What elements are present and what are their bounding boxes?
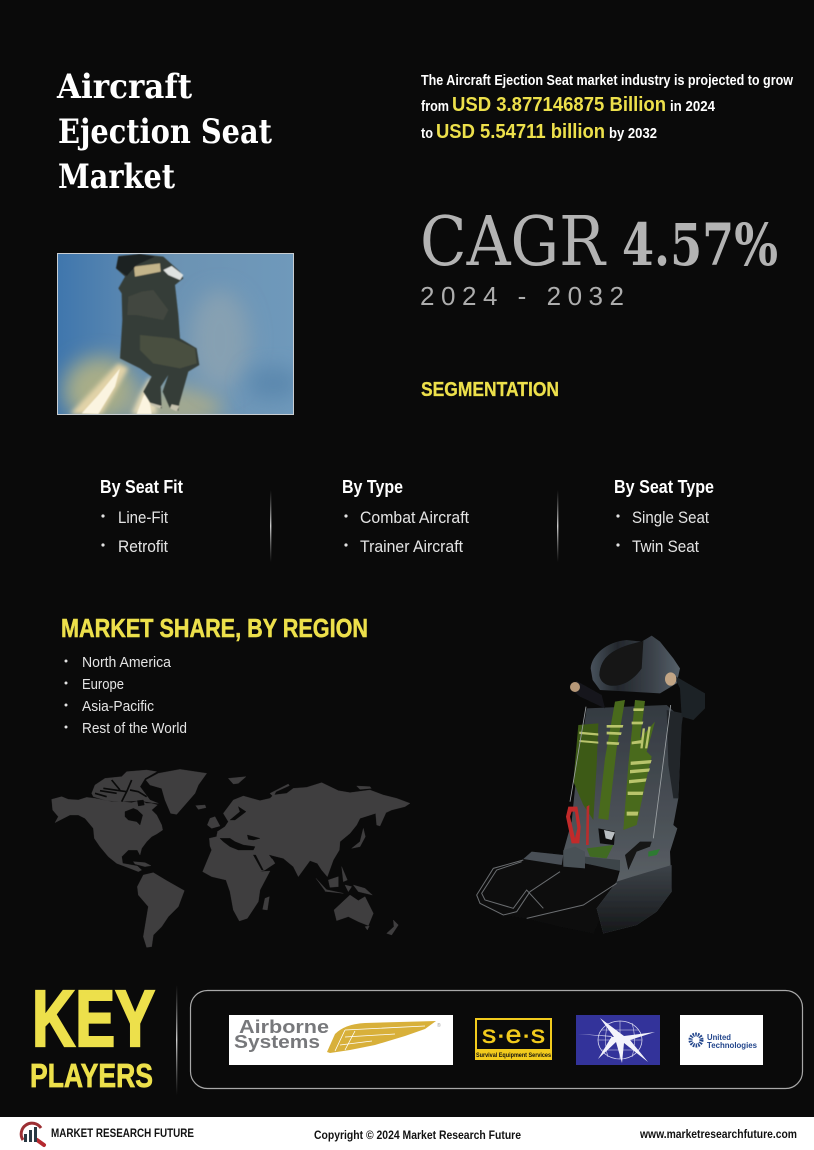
segment column: by seat fit: By Seat Fit [100,477,183,497]
logo: Airborne Systems: ® [437,1022,441,1029]
heading: key players: PLAYERS [30,1057,153,1094]
title: Aircraft [56,67,192,107]
title [56,67,272,197]
segment column: by seat type: By Seat Type [614,477,714,497]
CAGR figure: CAGR [420,203,607,282]
panel: key player logos [190,990,802,1088]
footer: Copyright © 2024 Market Research Future [314,1128,521,1142]
logo: United Technologies: United [707,1032,731,1042]
world map [52,769,410,947]
market projection text [421,73,794,143]
icon: market research future logo [21,1123,44,1145]
logo: SES [475,1018,552,1060]
heading: key players [30,974,155,1094]
heading: segmentation: SEGMENTATION [421,378,559,401]
logo: SES: s·e·s [482,1021,545,1049]
market projection text: to [421,126,433,142]
CAGR figure: 4.57% [622,211,778,279]
segment column: by type: By Type [342,477,403,497]
footer [0,1117,814,1150]
region list: Asia-Pacific [82,698,154,715]
region list [64,654,187,737]
logo: SES: Survival Equipment Services [476,1052,551,1059]
region list: Rest of the World [82,720,187,737]
logo: Airborne Systems: Airborne [239,1017,329,1037]
title: Market [58,157,175,197]
segment column: by type: Combat Aircraft [360,508,469,527]
region list: North America [82,654,172,671]
illustration: ejection seat [477,636,705,933]
CAGR figure [420,203,778,311]
logo: Airborne Systems: Systems [234,1032,320,1052]
heading: key players: KEY [32,974,155,1063]
region list: Europe [82,676,124,693]
heading: market share by region: MARKET SHARE, BY REGION [61,613,368,643]
market projection text: USD 5.54711 billion [436,121,605,143]
segment column: by seat type: Single Seat [632,508,709,527]
logo: United Technologies: Technologies [707,1040,757,1050]
title: Ejection Seat [58,112,272,152]
logo: globe and star [576,1015,660,1065]
CAGR figure: 2024 - 2032 [420,281,624,311]
segment column: by type: Trainer Aircraft [360,537,463,556]
segment column: by seat fit: Retrofit [118,537,168,556]
photo: ejection seat in flight [57,253,300,427]
market projection text: in 2024 [670,99,715,115]
segment column: by type [342,477,469,556]
segment column: by seat fit [100,477,183,556]
footer: MARKET RESEARCH FUTURE [51,1126,194,1140]
logo: United Technologies [680,1015,763,1065]
market projection text: by 2032 [609,126,657,142]
segment column: by seat type [614,477,714,556]
market projection text: USD 3.877146875 Billion [452,94,666,116]
market projection text: from [421,99,449,115]
logo: Airborne Systems [229,1015,453,1065]
segment column: by seat fit: Line-Fit [118,508,168,527]
segment column: by seat type: Twin Seat [632,537,699,556]
